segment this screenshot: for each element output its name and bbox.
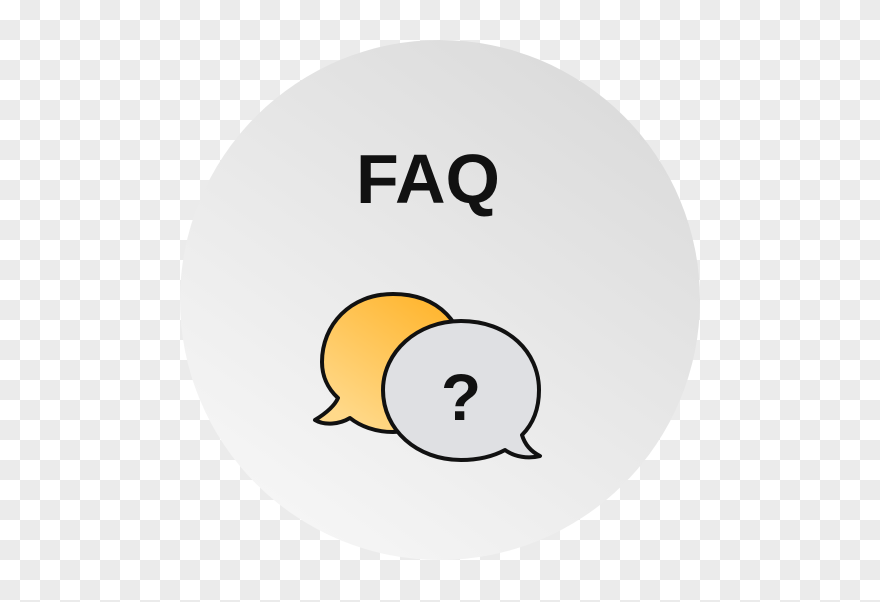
icon: question bubble xyxy=(383,321,540,460)
title: FAQ xyxy=(356,140,500,218)
icon: orange bubble xyxy=(315,294,465,432)
icon: speech bubbles xyxy=(315,294,540,460)
icon: question mark: ? xyxy=(441,360,481,434)
